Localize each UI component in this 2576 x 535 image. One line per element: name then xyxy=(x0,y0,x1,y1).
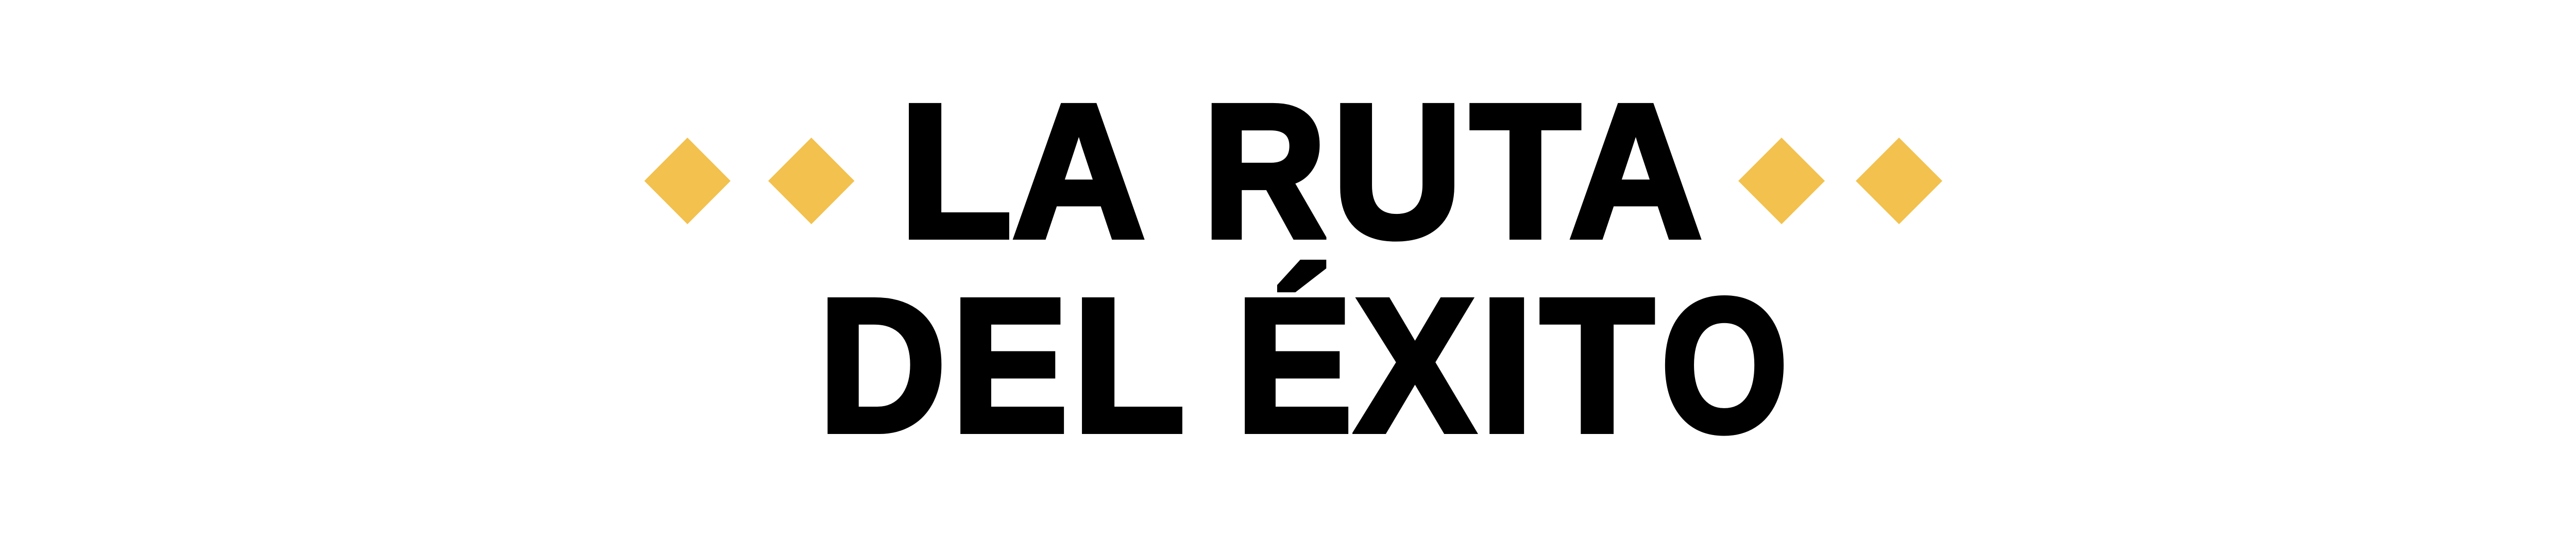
title line 2: X xyxy=(1355,259,1475,471)
title line 1 xyxy=(876,65,1784,436)
title line 1: T xyxy=(1470,65,1580,277)
title line 2: D xyxy=(819,259,946,471)
title line 2 xyxy=(819,259,1788,471)
title line 1: A xyxy=(1569,65,1702,277)
title line 1: L xyxy=(900,65,1012,277)
title line 1: R xyxy=(1203,65,1326,277)
title xyxy=(819,65,1788,471)
title line 2: É xyxy=(1236,259,1352,471)
title line 2: T xyxy=(1540,259,1654,471)
title line 1: A xyxy=(1012,65,1145,277)
title line 1: U xyxy=(1332,65,1462,277)
title line 2: O xyxy=(1661,259,1788,471)
title line 2: L xyxy=(1073,259,1185,471)
title line 2: E xyxy=(952,259,1068,471)
title line 2: I xyxy=(1480,259,1534,471)
